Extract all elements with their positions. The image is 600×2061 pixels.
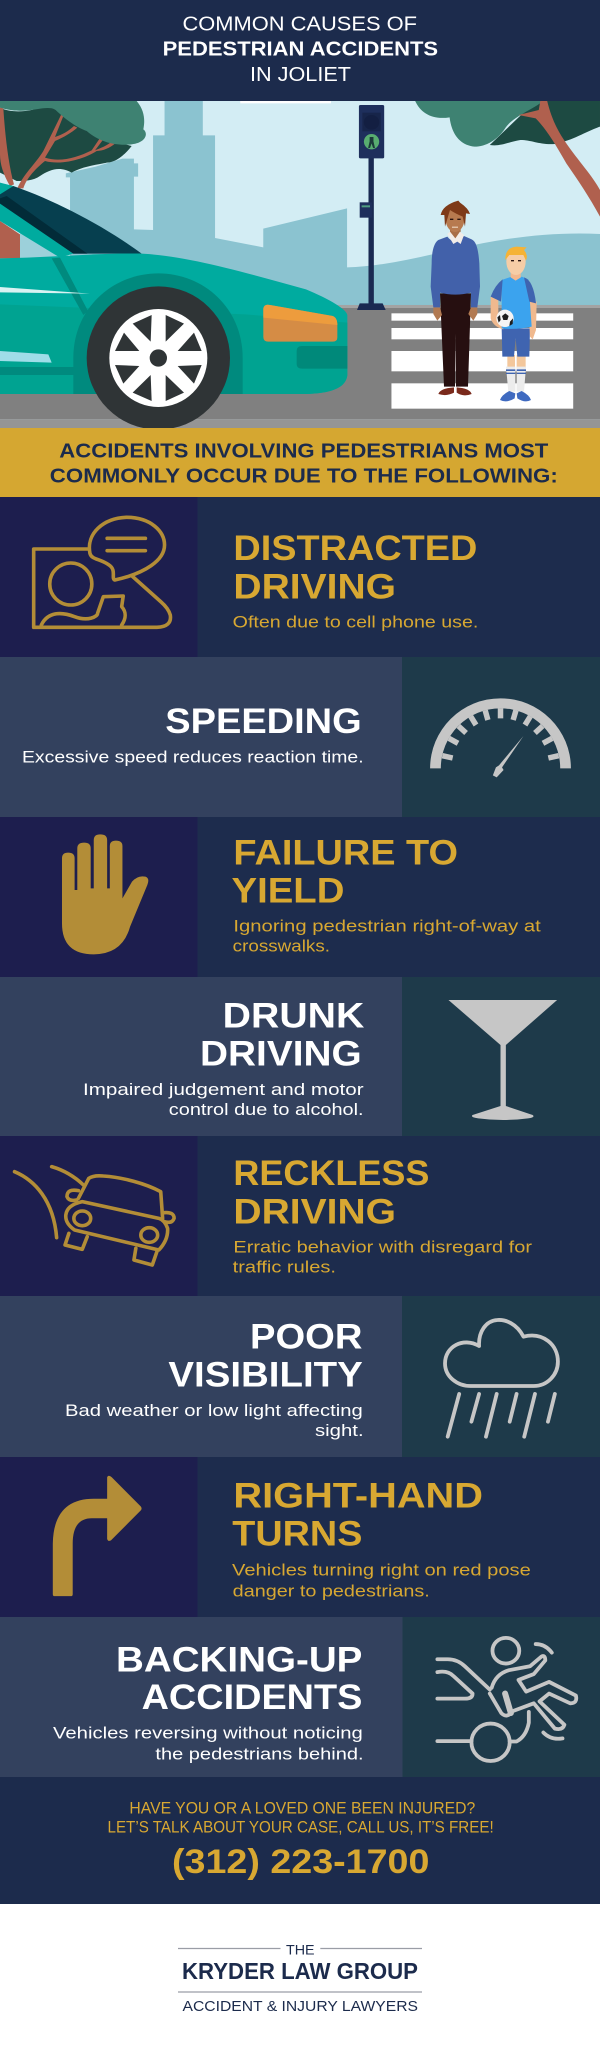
heading — [168, 1317, 363, 1395]
description: Impaired judgement and motor — [83, 1080, 364, 1099]
heading — [200, 997, 364, 1074]
phone number: (312) 223-1700 — [172, 1843, 429, 1881]
wheel — [87, 286, 230, 430]
icon: pedestrian struck by car — [437, 1638, 576, 1761]
banner text: COMMONLY OCCUR DUE TO THE FOLLOWING: — [50, 466, 558, 488]
heading: DRIVING — [200, 1035, 362, 1074]
panel: distracted driving — [0, 497, 600, 657]
illustration: street scene — [0, 101, 600, 430]
icon: speedometer — [430, 698, 571, 777]
panel: reckless driving — [0, 1136, 600, 1296]
panel: drunk driving — [0, 977, 600, 1136]
banner text: ACCIDENTS INVOLVING PEDESTRIANS MOST — [59, 441, 548, 463]
heading: POOR — [250, 1317, 362, 1356]
icon: rain cloud — [445, 1320, 558, 1437]
heading: DRIVING — [233, 567, 396, 606]
heading: SPEEDING — [165, 702, 362, 741]
description — [83, 1080, 364, 1119]
banner — [0, 428, 600, 497]
icon: swerving car — [15, 1167, 174, 1265]
traffic signal — [357, 105, 386, 310]
description: Excessive speed reduces reaction time. — [22, 748, 364, 767]
heading: DRIVING — [233, 1192, 396, 1231]
description: Often due to cell phone use. — [233, 613, 478, 632]
car — [0, 183, 347, 430]
man — [431, 201, 480, 395]
panel: poor visibility — [0, 1296, 600, 1457]
call to action — [0, 1777, 600, 1904]
call to action text: HAVE YOU OR A LOVED ONE BEEN INJURED? — [129, 1799, 475, 1818]
heading — [232, 833, 458, 911]
description: traffic rules. — [233, 1258, 336, 1277]
panel: backing-up accidents — [0, 1617, 600, 1777]
tree: right — [415, 101, 600, 217]
heading — [232, 1477, 483, 1554]
logo: THE — [286, 1942, 315, 1958]
logo: KRYDER LAW GROUP — [182, 1958, 418, 1984]
description — [233, 917, 541, 956]
heading: DISTRACTED — [233, 529, 477, 568]
heading: RIGHT-HAND — [233, 1477, 483, 1516]
description — [233, 1237, 532, 1277]
description: crosswalks. — [233, 937, 330, 956]
heading: FAILURE TO — [233, 833, 458, 872]
description — [53, 1723, 364, 1763]
banner text — [50, 441, 558, 488]
panel: right-hand turns — [0, 1457, 600, 1617]
headlight — [263, 305, 337, 342]
header — [0, 0, 600, 101]
logo: ACCIDENT & INJURY LAWYERS — [182, 1998, 418, 2015]
boy — [491, 247, 537, 401]
description: Erratic behavior with disregard for — [233, 1237, 532, 1256]
call to action text: LET’S TALK ABOUT YOUR CASE, CALL US, IT’S FREE! — [108, 1817, 494, 1836]
title: PEDESTRIAN ACCIDENTS — [163, 39, 438, 61]
description: sight. — [315, 1421, 364, 1440]
description — [65, 1401, 364, 1440]
grille — [297, 346, 347, 369]
heading — [116, 1640, 362, 1717]
heading: TURNS — [232, 1514, 362, 1554]
road — [0, 305, 600, 428]
call to action text — [108, 1799, 494, 1836]
icon: phone and speech bubble — [34, 517, 170, 627]
heading: BACKING-UP — [116, 1640, 362, 1679]
skyline — [66, 101, 600, 308]
title: COMMON CAUSES OF — [182, 14, 417, 36]
description: Ignoring pedestrian right-of-way at — [233, 917, 541, 936]
heading — [233, 529, 477, 606]
heading: ACCIDENTS — [142, 1678, 362, 1717]
tree: left — [0, 101, 146, 258]
heading: DRUNK — [223, 997, 364, 1036]
heading — [233, 1154, 429, 1231]
logo — [178, 1942, 422, 2015]
description — [232, 1560, 531, 1600]
heading: VISIBILITY — [168, 1356, 363, 1395]
icon: raised hand — [62, 834, 148, 954]
title — [163, 14, 438, 86]
crosswalk — [391, 313, 573, 409]
title: IN JOLIET — [250, 64, 351, 86]
description: control due to alcohol. — [169, 1100, 364, 1119]
description: Bad weather or low light affecting — [65, 1401, 363, 1420]
heading: YIELD — [232, 872, 344, 911]
description: Vehicles turning right on red pose — [232, 1560, 531, 1580]
description: danger to pedestrians. — [233, 1582, 430, 1600]
icon: martini glass — [448, 1000, 557, 1120]
description: Vehicles reversing without noticing — [53, 1723, 363, 1742]
description: the pedestrians behind. — [155, 1744, 364, 1763]
icon: right turn arrow — [53, 1476, 142, 1596]
panel: failure to yield — [0, 817, 600, 977]
heading: RECKLESS — [233, 1154, 429, 1193]
panel: speeding — [0, 657, 600, 817]
